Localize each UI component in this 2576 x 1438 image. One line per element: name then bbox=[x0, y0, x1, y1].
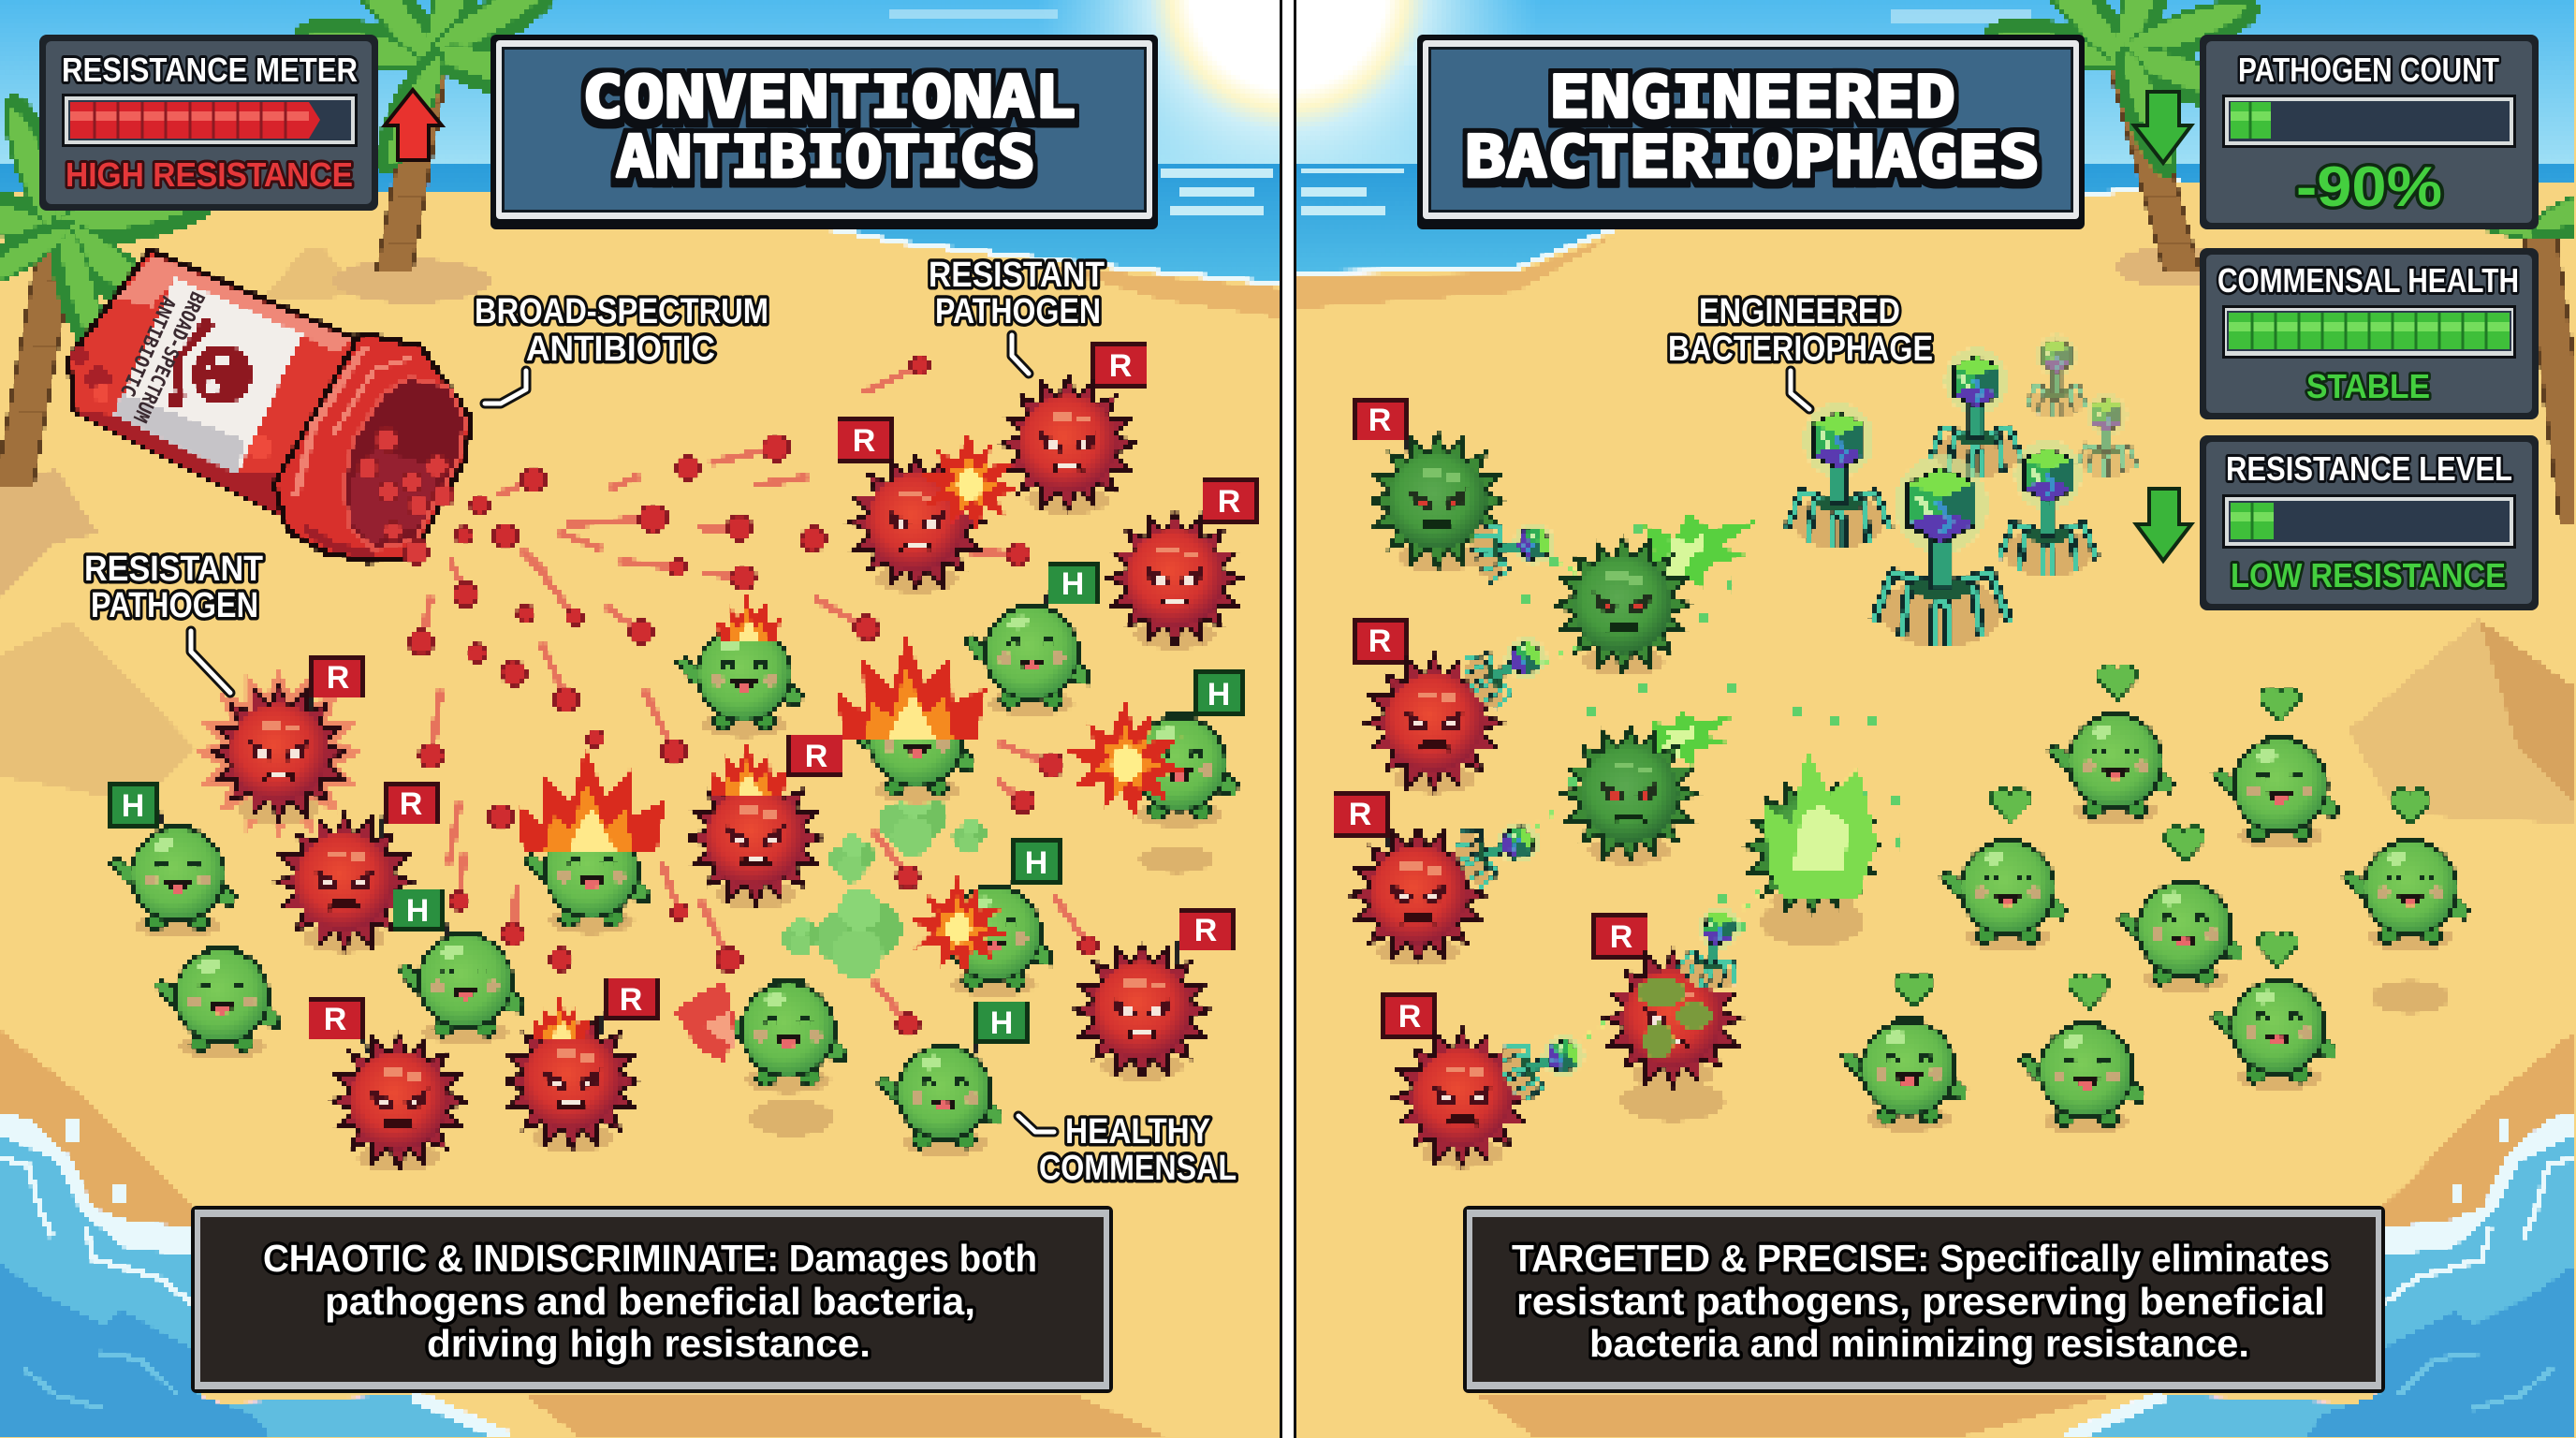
antibiotic spray bbox=[409, 356, 1098, 1035]
flag letters: R bbox=[1368, 403, 1391, 438]
flag letters: H bbox=[1208, 677, 1230, 712]
infected pathogen: green 3 bbox=[1562, 726, 1697, 865]
caption: conventional: driving high resistance. bbox=[427, 1322, 871, 1365]
bottle label text: ANTIBIOTIC bbox=[116, 293, 180, 400]
commensal a bbox=[109, 785, 236, 938]
title: engineered bacteriophages: ENGINEERED bbox=[1549, 63, 1955, 131]
callout: broad-spectrum antibiotic bbox=[475, 292, 768, 404]
ocean: right bbox=[1296, 165, 2576, 300]
centre divider bbox=[1280, 0, 1296, 1438]
commensal g bbox=[964, 563, 1097, 716]
water bottom left bbox=[0, 1030, 509, 1438]
callout: broad-spectrum antibiotic: ANTIBIOTIC bbox=[526, 330, 715, 369]
flag letters: R bbox=[1194, 913, 1217, 948]
caption: conventional: pathogens and beneficial bacteria, bbox=[325, 1280, 975, 1323]
callout: healthy commensal: COMMENSAL bbox=[1039, 1149, 1237, 1188]
caption: engineered: TARGETED & PRECISE: Specifically eliminates bbox=[1512, 1237, 2330, 1280]
skull icon bbox=[168, 318, 252, 408]
dune right bbox=[2348, 619, 2576, 824]
callout: resistant pathogen top: PATHOGEN bbox=[935, 292, 1101, 331]
bottle label text: BROAD-SPECTRUM bbox=[129, 288, 209, 426]
pathogen: red 1 bbox=[1354, 620, 1501, 794]
title: conventional antibiotics bbox=[490, 35, 1158, 229]
bottle opening bbox=[344, 377, 465, 550]
caption: engineered: resistant pathogens, preserving beneficial bbox=[1516, 1280, 2325, 1323]
shadows right bbox=[1620, 898, 2450, 1122]
infected pathogen: green 1 with flag bbox=[1354, 399, 1505, 572]
callout: healthy commensal bbox=[1018, 1112, 1237, 1188]
meter bar bbox=[62, 94, 358, 147]
commensal i with explosion bbox=[908, 842, 1061, 997]
resistance level bar bbox=[2222, 494, 2516, 549]
panel: resistance meter bbox=[39, 35, 378, 211]
callout: resistant pathogen top bbox=[929, 256, 1105, 374]
bottle rim bbox=[274, 335, 471, 562]
pathogen count heading: PATHOGEN COUNT bbox=[2238, 51, 2499, 89]
callout: engineered bacteriophage: BACTERIOPHAGE bbox=[1668, 330, 1933, 369]
flag letters: R bbox=[1349, 797, 1371, 832]
healthy commensals with hearts bbox=[1841, 665, 2468, 1135]
flag letters: R bbox=[1368, 624, 1391, 659]
flag letters: R bbox=[1109, 348, 1132, 384]
wet sand bands bbox=[1030, 234, 1619, 318]
beach right bbox=[1296, 183, 2576, 1438]
arrow: resistance up bbox=[385, 90, 442, 160]
callout: broad-spectrum antibiotic: BROAD-SPECTRUM bbox=[475, 292, 768, 331]
pathogen: resistant 8 bbox=[1001, 345, 1147, 515]
pathogen: resistant 4 with flame bbox=[505, 978, 657, 1152]
palm tree: left centre bbox=[289, 0, 580, 271]
phage fleet bbox=[1787, 334, 2137, 648]
flag letters: H bbox=[990, 1005, 1013, 1041]
commensal health heading: COMMENSAL HEALTH bbox=[2217, 261, 2519, 300]
right: green flames bbox=[1627, 513, 1758, 766]
flag letters: H bbox=[122, 788, 144, 824]
flag letters: R bbox=[327, 660, 349, 696]
foam line right bbox=[1296, 183, 2181, 275]
pathogen: resistant 9 with explosion bbox=[838, 419, 1022, 594]
commensal h with explosion bbox=[1066, 673, 1243, 828]
resistance level status: LOW RESISTANCE bbox=[2231, 556, 2506, 594]
pathogen: red 3 bbox=[1383, 995, 1530, 1168]
callout: resistant pathogen top: RESISTANT bbox=[929, 256, 1105, 295]
pathogen: red 2 bbox=[1334, 793, 1486, 966]
attached phages bbox=[1449, 511, 1754, 1106]
panel: resistance level bbox=[2200, 435, 2539, 610]
commensal health status: STABLE bbox=[2306, 367, 2430, 405]
title: conventional antibiotics: CONVENTIONAL bbox=[582, 63, 1076, 131]
pathogen: resistant 2 bbox=[277, 783, 437, 953]
dissolving pathogen: green flame bbox=[1745, 749, 1880, 917]
title: conventional antibiotics: ANTIBIOTICS bbox=[616, 123, 1035, 191]
title: engineered bacteriophages: BACTERIOPHAGES bbox=[1465, 123, 2040, 191]
flag letters: R bbox=[620, 982, 642, 1018]
commensal j with splash bbox=[674, 979, 846, 1093]
commensal e burnt bbox=[677, 594, 802, 738]
pills inside bottle bbox=[358, 429, 453, 565]
pathogen: resistant 1 bbox=[206, 656, 364, 826]
callout: resistant pathogen left bbox=[84, 550, 263, 693]
callout: engineered bacteriophage: ENGINEERED bbox=[1699, 292, 1900, 331]
commensal k bbox=[877, 1002, 1026, 1156]
callout: resistant pathogen left: PATHOGEN bbox=[91, 586, 258, 625]
flag letters: H bbox=[1061, 566, 1084, 602]
panel: commensal health bbox=[2200, 248, 2539, 419]
pathogen: resistant 5 with flame bbox=[688, 735, 842, 909]
flag letters bbox=[122, 348, 1632, 1041]
resistance level heading: RESISTANCE LEVEL bbox=[2226, 449, 2512, 488]
shoreline: bottom band shade bbox=[524, 1395, 2115, 1438]
pathogen: mixed, being converted bbox=[1595, 916, 1740, 1090]
palm tree: right centre bbox=[1979, 0, 2268, 271]
flag letters: H bbox=[1025, 845, 1047, 881]
flag letters: R bbox=[853, 423, 875, 459]
pathogen count bar bbox=[2222, 95, 2516, 148]
beach left bbox=[0, 192, 1281, 1438]
flag letters: R bbox=[805, 739, 827, 774]
sun bbox=[1037, 0, 1539, 242]
commensal c bbox=[393, 889, 523, 1045]
empty shadows left bbox=[750, 845, 1214, 1137]
dune left bbox=[0, 620, 197, 805]
title: engineered bacteriophages bbox=[1417, 35, 2085, 229]
arrow: resistance level down bbox=[2136, 489, 2191, 561]
commensal d with flame bbox=[517, 747, 666, 934]
callout: engineered bacteriophage bbox=[1668, 292, 1933, 409]
flag letters: H bbox=[406, 893, 429, 929]
flag letters: R bbox=[1398, 999, 1421, 1034]
flag letters: R bbox=[324, 1002, 346, 1037]
pathogen: resistant 7 bbox=[1107, 480, 1255, 650]
callout: resistant pathogen left: RESISTANT bbox=[84, 550, 263, 589]
commensal b bbox=[154, 946, 280, 1060]
caption: conventional bbox=[191, 1206, 1113, 1393]
caption: engineered: bacteria and minimizing resistance. bbox=[1589, 1322, 2249, 1365]
water bottom right bbox=[2067, 1030, 2576, 1438]
pathogen: resistant 6 bbox=[1075, 909, 1232, 1081]
commensal health bar bbox=[2222, 305, 2516, 359]
arrow: pathogen count down bbox=[2134, 92, 2191, 163]
sand shadows under palms bbox=[0, 246, 2228, 599]
callout: healthy commensal: HEALTHY bbox=[1065, 1112, 1210, 1152]
caption: conventional: CHAOTIC & INDISCRIMINATE: Damages both bbox=[263, 1237, 1037, 1280]
flag letters: R bbox=[1610, 919, 1632, 955]
ocean: left bbox=[0, 165, 1281, 309]
flag letters: R bbox=[1218, 484, 1240, 520]
palm tree: far right bbox=[2409, 159, 2576, 524]
palm tree: far left bbox=[0, 86, 221, 487]
infected pathogen: green 2 bbox=[1556, 537, 1690, 676]
pathogen count value: -90% bbox=[2296, 155, 2442, 218]
meter status: HIGH RESISTANCE bbox=[66, 155, 353, 194]
flag letters: R bbox=[400, 786, 422, 822]
caption: engineered bbox=[1463, 1206, 2385, 1393]
bottle label bbox=[114, 278, 302, 475]
small dune bbox=[262, 247, 363, 300]
horizon shimmer bbox=[1161, 167, 1404, 215]
meter heading: RESISTANCE METER bbox=[62, 51, 358, 89]
green puffs of dying commensals bbox=[783, 784, 987, 979]
panel: pathogen count bbox=[2200, 35, 2539, 229]
right: phage beams and sparkles bbox=[1509, 521, 1904, 1049]
commensal f with explosion bbox=[837, 635, 987, 803]
clouds bbox=[889, 9, 2031, 64]
pill bottle bbox=[68, 250, 471, 565]
foam line left bbox=[796, 225, 1281, 286]
pathogen: resistant 3 bbox=[309, 998, 466, 1172]
sky bbox=[0, 0, 2576, 187]
